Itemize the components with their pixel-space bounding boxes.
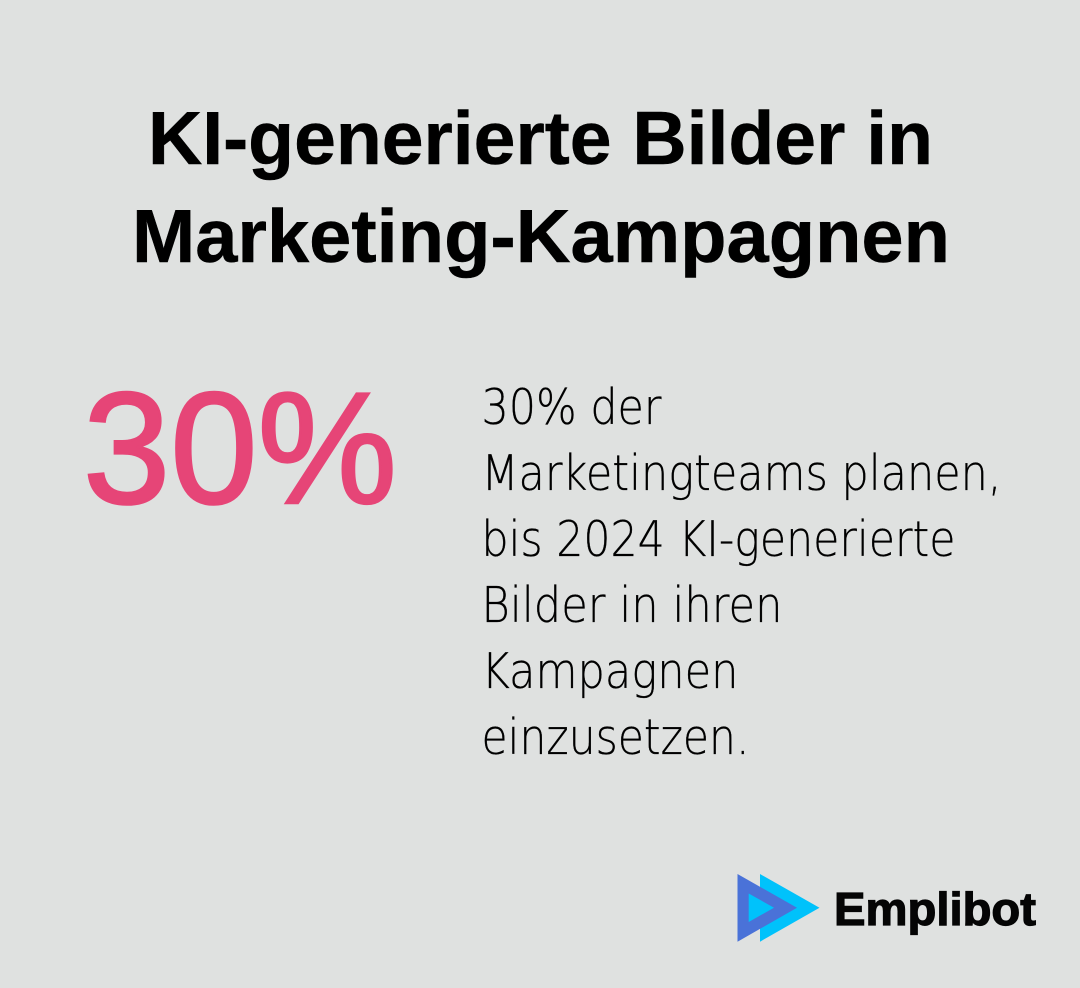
big statistic: 30%: 30% (83, 359, 397, 537)
description text: 30% der (482, 379, 662, 436)
description text: Marketingteams planen, (482, 445, 1002, 502)
icon: play triangles (738, 874, 820, 942)
logo: Emplibot (738, 874, 1036, 942)
description text: bis 2024 KI-generierte (482, 511, 956, 568)
description text (482, 379, 1002, 766)
logo wordmark: Emplibot (834, 883, 1036, 935)
title (132, 96, 950, 278)
description text: einzusetzen. (482, 709, 750, 766)
title: KI-generierte Bilder in (148, 96, 933, 180)
description text: Bilder in ihren (482, 577, 782, 634)
description text: Kampagnen (482, 643, 738, 700)
title: Marketing-Kampagnen (132, 194, 950, 278)
